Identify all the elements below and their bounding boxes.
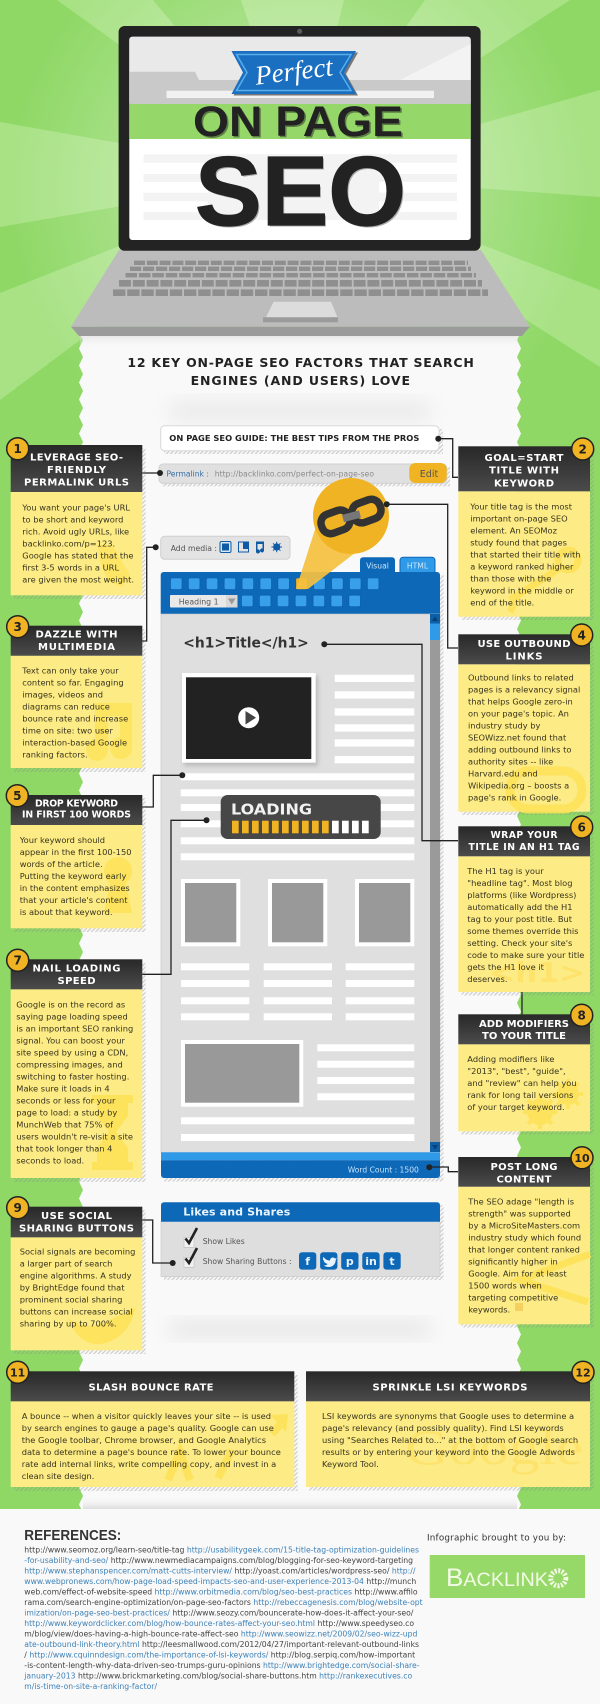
header: WRAP YOUR [490,830,558,841]
body text: LSI keywords are synonyms that Google uses to determine a [322,1411,574,1421]
body text: Keyword Tool. [322,1459,379,1469]
body text: in the content emphasizes [20,883,130,893]
loading box: LOADING [231,800,312,818]
watermark text: Google: Google [405,1419,583,1475]
body text: study found that pages [470,537,567,547]
laptop base [71,250,530,336]
body text: You want your page's URL [21,502,130,512]
number badge [571,816,593,838]
number badge: 8 [578,1009,586,1023]
body text: a keyword ranked higher [470,561,574,571]
ribbon: Perfect: Perfect [252,51,336,91]
references list: m/blog/view/does-having-a-high-bounce-rate-affect-seo http://www.seowizz.net/2009/02/seo-wizz-upd [24,1630,417,1639]
watermark icon: music note [86,703,132,761]
panel 1: permalink urls [7,438,146,599]
permalink bar: Permalink : [166,470,209,478]
body text: automatically add the H1 [467,902,573,912]
body text: Social signals are becoming [20,1247,135,1257]
body text: results or by entering your keyword into the Google Adwords [322,1447,575,1457]
body text: Outbound links to related [468,672,574,682]
connector lines [142,439,522,1263]
body text: 1500 words when [468,1281,542,1291]
icon: chain link [318,497,384,536]
body text: page to load: a study by [16,1107,117,1117]
panel 9: social sharing [7,1197,146,1354]
editor toolbar [161,572,440,614]
backlinko logo [430,1555,585,1598]
add media bar [161,536,290,559]
body text: data to determine a page's bounce rate. To lower your bounce [22,1447,281,1457]
header: PERMALINK URLS [24,478,129,489]
body text: element. An SEOMoz [470,525,557,535]
body text: by BrightEdge found that [20,1283,125,1293]
likes and shares panel [161,1202,444,1280]
body text: a larger part of search [20,1259,112,1269]
number badge [572,1361,594,1383]
header: CONTENT [496,1174,552,1185]
social buttons: f [305,1255,310,1268]
body text: are given the most weight. [22,574,134,584]
panel 8: modifiers [458,1004,594,1134]
header [458,1014,590,1044]
body text: seconds to load. [16,1155,84,1165]
header [458,634,590,664]
body text: seconds or less for your [16,1095,116,1105]
panel 5: first 100 words [6,785,145,932]
footer background [0,1509,600,1704]
screen content [129,37,471,240]
number badge [7,616,29,638]
body text: that your article's content [20,895,128,905]
body text: significantly higher in [468,1257,558,1267]
word count bar: Word Count : 1500 [348,1165,419,1174]
body text: that took longer than 4 [16,1143,112,1153]
body text: time on site: two user [22,726,114,736]
body text: Harvard.edu and [468,768,538,778]
title: ON PAGE: ON PAGE [194,99,404,147]
body text: authority sites -- like [468,756,553,766]
body text: compressing images, and [16,1059,123,1069]
editor tabs: Visual [366,562,389,570]
number badge: 9 [14,1201,22,1215]
body text: that longer content ranked [468,1245,580,1255]
media icons [220,542,282,553]
header: TITLE WITH [489,466,559,477]
body text: words of the article. [20,859,103,869]
loading box [221,795,381,839]
icon: sunburst [551,1571,566,1586]
image placeholders [181,879,414,1107]
references list: -for-usability-and-seo/ http://www.newmediacampaigns.com/blog/blogging-for-seo-keyword-targeting [24,1556,413,1565]
header [11,1207,142,1237]
number badge: 1 [14,442,22,456]
header [11,445,142,492]
body text: engine algorithms. A study [20,1271,132,1281]
references list: imization/on-page-seo-best-practices/ http://www.seozy.com/bouncerate-how-does-it-affect-your-seo/ [24,1609,413,1618]
body text: A bounce -- when a visitor quickly leaves your site -- is used [22,1411,271,1421]
number badge [7,1361,29,1383]
body text: to be short and keyword [22,514,123,524]
body text: Text can only take your [21,666,119,676]
body text: some themes override this [467,926,579,936]
edit button: Edit [420,469,438,480]
panel 4: outbound links [458,624,594,815]
panel 3: multimedia [7,616,146,772]
references list: www.webpronews.com/how-page-load-speed-impacts-seo-and-user-experience-2013-04 http://munch [24,1577,416,1586]
body text: Make sure it loads in 4 [16,1083,110,1093]
body text: end of the title. [470,597,534,607]
references heading: REFERENCES: [24,1527,121,1544]
number badge: 10 [574,1152,590,1165]
panel 11: bounce rate [7,1361,297,1491]
body text: content so far. Engaging [22,678,124,688]
body text: Your keyword should [19,835,105,845]
checkboxes: Show Sharing Buttons : [203,1257,292,1266]
permalink bar [159,463,450,486]
body text: Putting the keyword early [20,871,127,881]
header: TO YOUR TITLE [482,1031,566,1042]
body text: page's rank in Google. [468,792,561,802]
references list: http://www.seomoz.org/learn-seo/title-tag http://usabilitygeek.com/15-title-tag-optimization-guidelines [24,1546,419,1555]
social buttons: p [346,1255,354,1268]
social buttons: in [365,1255,377,1268]
heading select: Heading 1 [179,597,219,606]
webcam [297,29,302,34]
body text: The SEO adage "length is [467,1197,574,1207]
body text: Wikipedia.org – boosts a [468,780,569,790]
paper strip [79,330,521,1510]
subtitle: ENGINES (AND USERS) LOVE [191,373,410,388]
body text: buttons can increase social [20,1307,133,1317]
references list: -is-content-length-why-data-driven-seo-trumps-guru-opinions http://www.brightedge.com/social-share- [24,1661,420,1670]
body text: keyword in the middle or [470,585,574,595]
body text: and "review" can help you [467,1078,577,1088]
link magnifier callout [296,478,389,589]
body text: saying page loading speed [16,1011,128,1021]
header [11,795,142,825]
header: KEYWORD [494,478,554,489]
references list: http://www.keywordclicker.com/blog/how-bounce-rates-affect-your-seo.html http://www.speedyseo.co [24,1619,414,1628]
body text: users wouldn't re-visit a site [16,1131,133,1141]
header [11,626,142,656]
body text: backlinko.com/p=123. [22,538,115,548]
references list: rama.com/search-engine-optimization/on-page-seo-factors http://rebeccagenesis.com/blog/website-opt [24,1598,423,1607]
number badge [6,785,28,807]
body text: targeting competitive [468,1293,558,1303]
body text: platforms (like Wordpress) [467,890,576,900]
body text: strength" was supported [468,1209,571,1219]
header: ADD MODIFIERS [479,1019,569,1030]
body text: tag to your post title. But [467,914,573,924]
references list: http://www.stephanspencer.com/matt-cutts-interview/ http://yoast.com/articles/wordpress-seo/ http:// [24,1567,415,1576]
body text: bounce rate and increase [22,714,128,724]
heading select [170,595,238,608]
body text: site speed by using a CDN, [16,1047,128,1057]
guide title bar: ON PAGE SEO GUIDE: THE BEST TIPS FROM THE PROS [169,433,419,443]
references list: / http://www.cquinndesign.com/the-importance-of-lsi-keywords/ http://blog.serpiq.com/how-important [24,1651,415,1660]
body text: Google. Aim for at least [468,1269,567,1279]
number badge [7,949,29,971]
scrollbar [430,614,440,1152]
add media bar: Add media : [171,544,217,553]
header [11,1371,294,1401]
header: NAIL LOADING [32,963,120,974]
references list: ate-outbound-link-theory.html http://leesmallwood.com/2012/04/27/important-relevant-outbound-links [24,1640,419,1649]
checkboxes: Show Likes [203,1237,245,1246]
body text: is about that keyword. [20,907,113,917]
body text: Google is on the record as [16,999,125,1009]
body text: important on-page SEO [470,513,568,523]
watermark icon: arrows [168,1414,288,1480]
header [458,446,590,491]
body text: by search engines to gauge a page's quality. Google can use [22,1423,274,1433]
body text: the Google toolbar, Chrome browser, and Google Analytics [22,1435,266,1445]
editor tabs [360,557,435,575]
body text: is an important SEO ranking [16,1023,133,1033]
social buttons: t [389,1255,395,1268]
title: ON PAGE: ON PAGE [193,98,403,146]
body text: images, videos and [22,690,103,700]
word count bar [161,1152,440,1178]
body text: rich. Avoid ugly URLs, like [22,526,129,536]
body text: keywords. [468,1305,510,1315]
watermark icon: hourglass [92,1095,133,1170]
credit text: Infographic brought to you by: [427,1534,566,1544]
body text: industry study by [468,720,541,730]
header: SLASH BOUNCE RATE [88,1382,214,1393]
title: SEO: SEO [195,136,406,246]
body text: Google has stated that the [22,550,134,560]
number badge: 5 [13,789,21,803]
laptop [71,26,530,336]
body text: by a MicroSiteMasters.com [468,1221,580,1231]
body text: adding outbound links to [468,744,571,754]
body text: of your target keyword. [467,1102,565,1112]
body text: signal. You can boost your [16,1035,125,1045]
body text: The H1 tag is your [466,866,544,876]
header: DAZZLE WITH [36,630,118,641]
body text: Your title tag is the most [469,501,573,511]
body text: pages is a relevancy signal [468,684,580,694]
header: SPEED [58,976,96,987]
header: FRIENDLY [47,465,107,476]
header: SPRINKLE LSI KEYWORDS [372,1382,528,1393]
subtitle: 12 KEY ON-PAGE SEO FACTORS THAT SEARCH [127,355,474,370]
header [458,826,590,856]
number badge [572,438,594,460]
body text: "headline tag". Most blog [467,878,573,888]
number badge: 6 [578,820,586,834]
body text: MunchWeb that 75% of [16,1119,114,1129]
number badge: 2 [579,442,587,456]
panel 2: title keyword [458,438,594,620]
references list: m/is-time-on-site-a-ranking-factor/ [24,1682,157,1691]
watermark icon: link [98,545,130,587]
header: USE OUTBOUND [478,639,570,650]
body text: rank for long tail versions [467,1090,573,1100]
number badge: 4 [578,628,586,642]
body text: first 3-5 words in a URL [22,562,119,572]
editor window [161,557,443,1182]
likes header [161,1202,440,1277]
body text: on your page's topic. An [468,708,569,718]
body text: code to make sure your title [467,950,584,960]
header [306,1371,590,1401]
title: SEO: SEO [196,138,408,248]
header: TITLE IN AN H1 TAG [468,842,580,853]
body text: diagrams can reduce [22,702,110,712]
header: GOAL=START [484,453,564,464]
panel 12: lsi keywords [306,1361,594,1490]
ribbon: Perfect [232,51,358,96]
number badge [571,624,593,646]
header: LINKS [506,652,542,663]
body text: deserves. [467,974,507,984]
laptop screen bezel [119,26,481,251]
social buttons [299,1252,401,1270]
body text: setting. Check your site's [467,938,572,948]
body text: clean site design. [22,1471,94,1481]
body text: rate add internal links, write compelling copy, and invest in a [22,1459,276,1469]
body text: "2013", "best", "guide", [467,1066,566,1076]
header: DROP KEYWORD [35,799,118,810]
number badge: 7 [14,954,22,968]
body text: Adding modifiers like [467,1054,554,1064]
body text: page's relevancy (and possibly quality). Find LSI keywords [322,1423,564,1433]
watermark icon: link [510,771,582,809]
watermark icon: keyhole [104,857,132,913]
backlinko logo: BACKLINK [446,1564,548,1592]
number badge [571,1147,593,1169]
subtitle [127,355,474,388]
body text: that started their title with [470,549,581,559]
body text: SEOWizz.net found that [468,732,567,742]
panel 10: long content [458,1147,594,1328]
watermark icon: pencil [515,1254,590,1311]
body text: appear in the first 100-150 [20,847,132,857]
panel 6: h1 tag [458,816,594,996]
body text: sharing by up to 700%. [20,1319,117,1329]
number badge [7,1197,29,1219]
header [458,1157,590,1187]
panel 7: loading speed [7,949,146,1182]
watermark icon: bird [68,1308,135,1344]
body text: using "Searches Related to..." at the bottom of Google search [322,1435,578,1445]
h1 title text: <h1>Title</h1> [183,636,309,652]
references list: january-2013 http://www.brickmarketing.com/blog/social-share-buttons.htm http://rankexecutives.co [24,1672,412,1681]
header: MULTIMEDIA [38,642,115,653]
header: IN FIRST 100 WORDS [22,810,131,821]
permalink bar: http://backlinko.com/perfect-on-page-seo [215,470,374,478]
references [23,1527,425,1691]
body text: than those with the [470,573,551,583]
header: POST LONG [490,1162,558,1173]
header: SHARING BUTTONS [19,1223,134,1234]
guide title bar [161,426,443,454]
header: LEVERAGE SEO- [30,453,123,464]
body text: interaction-based Google [22,738,127,748]
watermark text: h1: <h1> [489,956,585,989]
body text: that helps Google zero-in [468,696,573,706]
header [11,959,142,989]
connector dots [153,436,441,1266]
editor tabs: HTML [407,562,429,570]
body text: prominent social sharing [20,1295,122,1305]
editor body [161,614,440,1152]
number badge: 3 [14,620,22,634]
number badge [7,438,29,460]
checkboxes [184,1228,292,1267]
text lines [181,675,414,1141]
body text: switching to faster hosting. [16,1071,129,1081]
body text: ranking factors. [22,750,88,760]
watermark icon: gears [523,1079,583,1129]
body text: industry study which found [468,1233,581,1243]
number badge: 11 [10,1367,25,1380]
body text: gets the H1 love it [467,962,545,972]
number badge: 12 [575,1367,591,1380]
watermark icon: key [510,550,578,612]
edit button [409,463,447,483]
video placeholder [182,673,318,766]
header: USE SOCIAL [41,1211,113,1222]
likes header: Likes and Shares [183,1205,291,1218]
references list: web.com/effect-of-website-speed http://www.orbitmedia.com/blog/seo-best-practices http://www.affilo [24,1588,418,1597]
